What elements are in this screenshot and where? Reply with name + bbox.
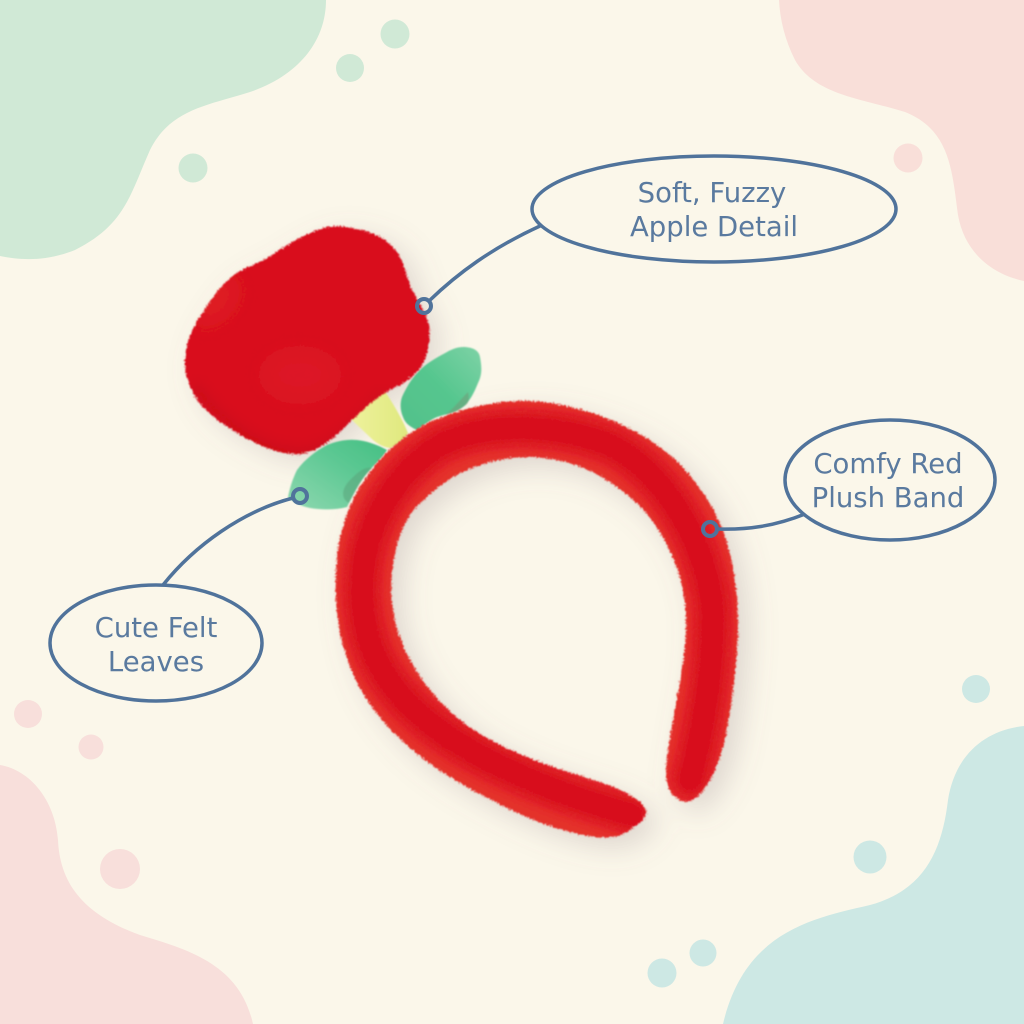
stem <box>351 388 408 448</box>
callout: felt leaves <box>50 489 307 701</box>
apple <box>185 226 430 454</box>
callout: apple detail: Soft, Fuzzy <box>638 177 786 209</box>
callout: felt leaves: Leaves <box>108 646 204 678</box>
callout: felt leaves: Cute Felt <box>95 612 218 644</box>
leaf: lower green leaf <box>288 440 387 509</box>
blob: bottom-left pink <box>0 765 253 1024</box>
apple shadow <box>196 234 441 462</box>
blob: top-left green <box>0 0 326 259</box>
callout: apple detail: Apple Detail <box>630 211 798 243</box>
callout: plush band: Plush Band <box>812 482 964 514</box>
leaf: upper green leaf <box>401 347 481 430</box>
blob: bottom-right teal <box>723 726 1024 1024</box>
blob: top-right pink <box>779 0 1024 281</box>
callout: plush band <box>703 420 995 540</box>
callout: plush band: Comfy Red <box>813 448 963 480</box>
headband shadow <box>347 411 749 848</box>
headband: red plush band <box>336 401 738 838</box>
callout: apple detail <box>417 156 896 313</box>
